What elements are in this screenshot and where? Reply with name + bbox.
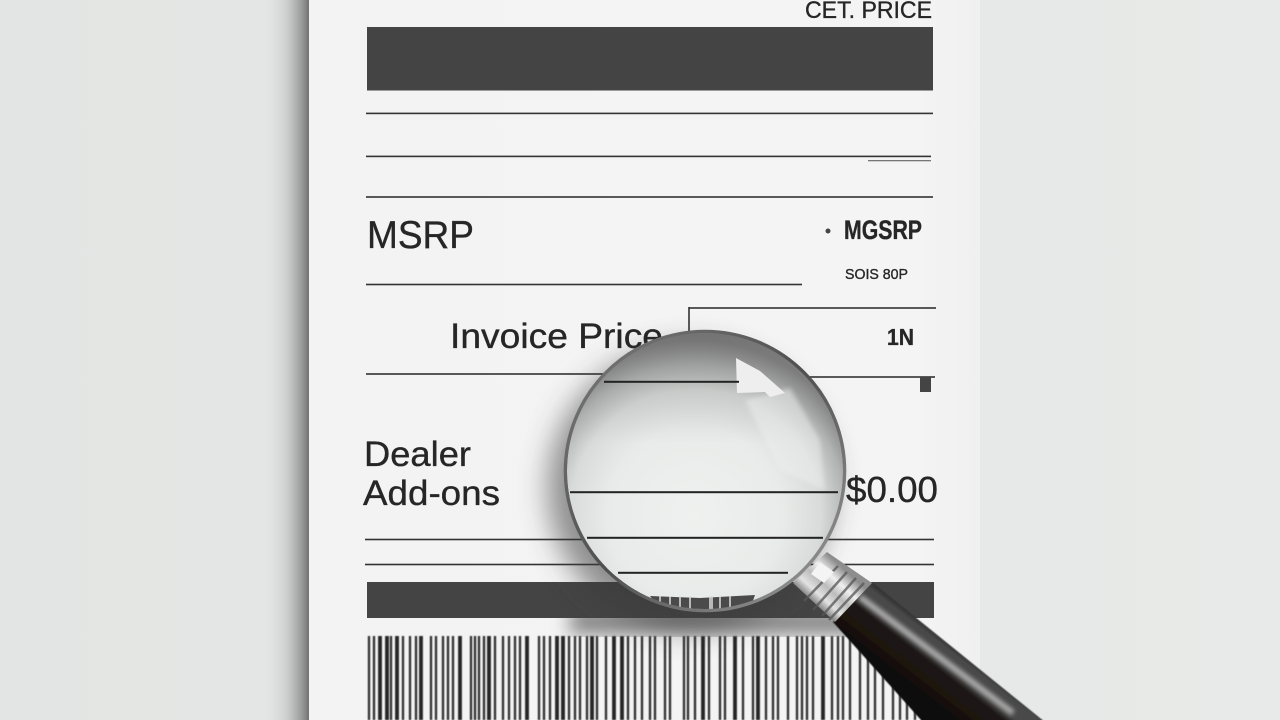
metal ferrule <box>793 552 872 622</box>
lower ruled lines <box>365 539 934 565</box>
price sticker sheet <box>309 0 1045 720</box>
MSRP row: SOIS 80P <box>845 266 908 283</box>
paper shadow <box>262 0 310 720</box>
handle <box>833 583 1045 720</box>
top dark header bar <box>367 27 933 90</box>
invoice price row <box>366 307 936 392</box>
invoice price row: Invoice Price <box>450 317 663 356</box>
magnified barcode sliver <box>650 595 755 609</box>
MSRP row: MSRP <box>367 214 474 257</box>
illustration: price sticker with magnifying glass <box>276 0 1044 720</box>
shadow strip above barcode <box>558 618 847 637</box>
lens drop shadow on paper <box>548 346 832 630</box>
dealer add-ons row: Add-ons <box>363 474 500 513</box>
bottom dark bar <box>367 582 934 618</box>
dealer add-ons row: Dealer <box>364 435 471 474</box>
invoice price row: 1N <box>887 324 914 350</box>
magnifying glass <box>565 332 1045 720</box>
metal rim <box>566 332 844 610</box>
dealer add-ons row: $0.00 <box>846 469 938 510</box>
blank ruled lines <box>366 113 933 198</box>
lens highlight <box>736 358 825 490</box>
lens glass <box>565 333 845 609</box>
magnified lines <box>570 381 838 574</box>
MSRP row: MGSRP <box>844 215 922 245</box>
dealer add-ons row <box>363 435 938 513</box>
MSRP row <box>366 214 922 285</box>
barcode <box>369 636 915 720</box>
